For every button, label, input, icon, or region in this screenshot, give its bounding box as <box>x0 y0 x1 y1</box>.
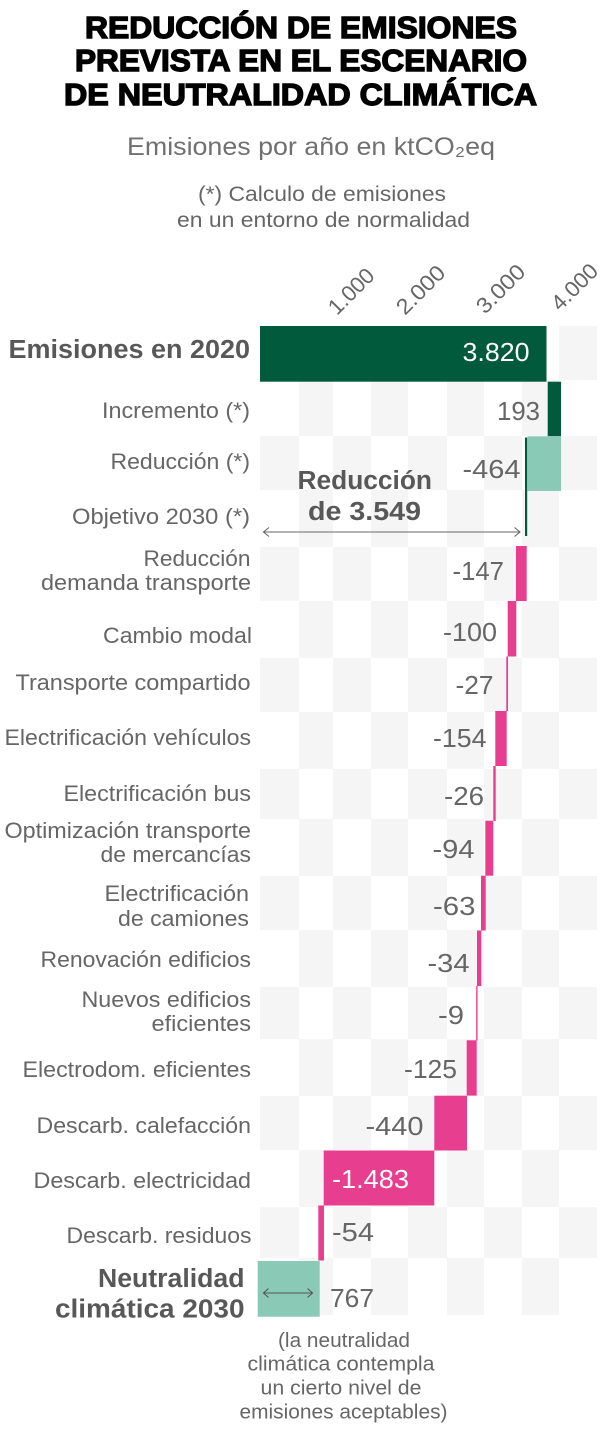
label: electrodom. eficientes: Electrodom. eficientes <box>22 1057 251 1082</box>
value: -34: -34 <box>428 950 470 978</box>
bar: transporte compartido <box>506 656 508 711</box>
label: optimización transporte de mercancías: de mercancías <box>100 842 251 867</box>
bar: reducción <box>528 436 561 491</box>
label: electrificación de camiones: de camiones <box>118 906 249 931</box>
bar: reducción demanda transporte <box>516 546 527 601</box>
label: reducción demanda transporte <box>41 546 251 595</box>
footnote: emisiones aceptables) <box>240 1402 448 1424</box>
value: -464: -464 <box>462 456 520 484</box>
label: nuevos edificios eficientes: eficientes <box>152 1011 251 1036</box>
checkerboard grid background <box>260 326 597 1315</box>
label: electrificación de camiones <box>104 881 249 931</box>
callout: reducción de 3.549: Reducción <box>298 467 432 495</box>
label: reducción demanda transporte: Reducción <box>144 546 250 571</box>
footnote: un cierto nivel de <box>260 1378 422 1400</box>
bar: electricidad <box>324 1150 434 1206</box>
note: calculation: (*) Calculo de emisiones <box>198 182 446 206</box>
value: -147: -147 <box>452 558 504 586</box>
bar values <box>330 339 540 1313</box>
label: electrificación bus: Electrificación bus <box>64 781 251 806</box>
callout: reducción de 3.549: de 3.549 <box>308 498 421 526</box>
bar: electrificación camiones <box>481 876 486 930</box>
value: -27: -27 <box>456 672 494 700</box>
arrow: reducción span <box>264 528 520 536</box>
bar: electrificación vehículos <box>495 711 507 766</box>
callout: reducción de 3.549 <box>298 467 432 526</box>
bar: neutralidad 2030 <box>258 1261 320 1317</box>
bar: calefacción <box>434 1096 467 1150</box>
bar: cambio modal <box>508 601 516 656</box>
bar: optimización transporte <box>485 821 493 876</box>
note: calculation <box>177 182 470 232</box>
label: neutralidad climática 2030 <box>55 1265 244 1324</box>
bar: residuos <box>318 1206 324 1260</box>
arrow: neutralidad span <box>264 1288 312 1298</box>
label: descarb. electricidad: Descarb. electricidad <box>34 1168 251 1193</box>
label: renovación edificios: Renovación edificios <box>40 947 251 972</box>
footnote: climática contempla <box>248 1354 435 1376</box>
axis labels <box>323 258 600 320</box>
label: cambio modal: Cambio modal <box>103 623 252 648</box>
label: optimización transporte de mercancías: Optimización transporte <box>4 818 251 843</box>
bar: electrificación bus <box>493 766 496 821</box>
label: transporte compartido: Transporte compartido <box>16 670 250 695</box>
axis labels: 2.000 <box>391 260 450 320</box>
label: descarb. residuos: Descarb. residuos <box>66 1223 252 1248</box>
axis labels: 1.000 <box>323 263 379 320</box>
category labels <box>4 336 252 1324</box>
label: neutralidad climática 2030: climática 2030 <box>55 1296 244 1324</box>
bar: objetivo 2030 <box>525 438 527 536</box>
label: electrificación vehículos: Electrificación vehículos <box>4 725 251 750</box>
value: -125: -125 <box>404 1056 457 1084</box>
value: -1.483: -1.483 <box>332 1166 409 1194</box>
value: 767: 767 <box>330 1285 374 1313</box>
value: 3.820: 3.820 <box>462 339 530 367</box>
bar: incremento <box>548 382 561 436</box>
footnote <box>240 1330 448 1424</box>
bar: nuevos edificios <box>476 986 478 1040</box>
bar: renovación edificios <box>477 930 481 986</box>
title: PREVISTA EN EL ESCENARIO <box>75 43 527 78</box>
label: descarb. calefacción: Descarb. calefacción <box>36 1113 251 1138</box>
title: REDUCCIÓN DE EMISIONES <box>85 9 517 45</box>
label: optimización transporte de mercancías <box>4 818 251 867</box>
label: nuevos edificios eficientes <box>82 987 251 1036</box>
subtitle: Emisiones por año en ktCO₂eq <box>127 133 495 161</box>
label: nuevos edificios eficientes: Nuevos edificios <box>82 987 251 1012</box>
note: calculation: en un entorno de normalidad <box>177 208 470 232</box>
label: electrificación de camiones: Electrificación <box>104 881 249 906</box>
label: reducción: Reducción (*) <box>110 449 250 474</box>
value: 193: 193 <box>497 398 540 426</box>
label: objetivo 2030: Objetivo 2030 (*) <box>72 504 250 529</box>
title: DE NEUTRALIDAD CLIMÁTICA <box>64 77 537 112</box>
value: -63: -63 <box>433 893 476 921</box>
bar: emisiones 2020 <box>260 326 546 382</box>
value: -9: -9 <box>438 1002 464 1030</box>
label: incremento: Incremento (*) <box>102 398 250 423</box>
title <box>64 9 537 112</box>
value: -54: -54 <box>332 1219 374 1247</box>
label: neutralidad climática 2030: Neutralidad <box>98 1265 244 1293</box>
label: emisiones en 2020: Emisiones en 2020 <box>8 336 250 364</box>
value: -100: -100 <box>443 619 497 647</box>
label: reducción demanda transporte: demanda transporte <box>41 570 251 595</box>
axis labels: 3.000 <box>471 259 530 319</box>
value: -440: -440 <box>366 1113 424 1141</box>
value: -154: -154 <box>433 725 486 753</box>
bar: electrodomésticos <box>467 1040 477 1096</box>
value: -94: -94 <box>432 836 474 864</box>
value: -26: -26 <box>444 783 484 811</box>
footnote: (la neutralidad <box>278 1330 410 1352</box>
waterfall bars <box>258 326 561 1317</box>
